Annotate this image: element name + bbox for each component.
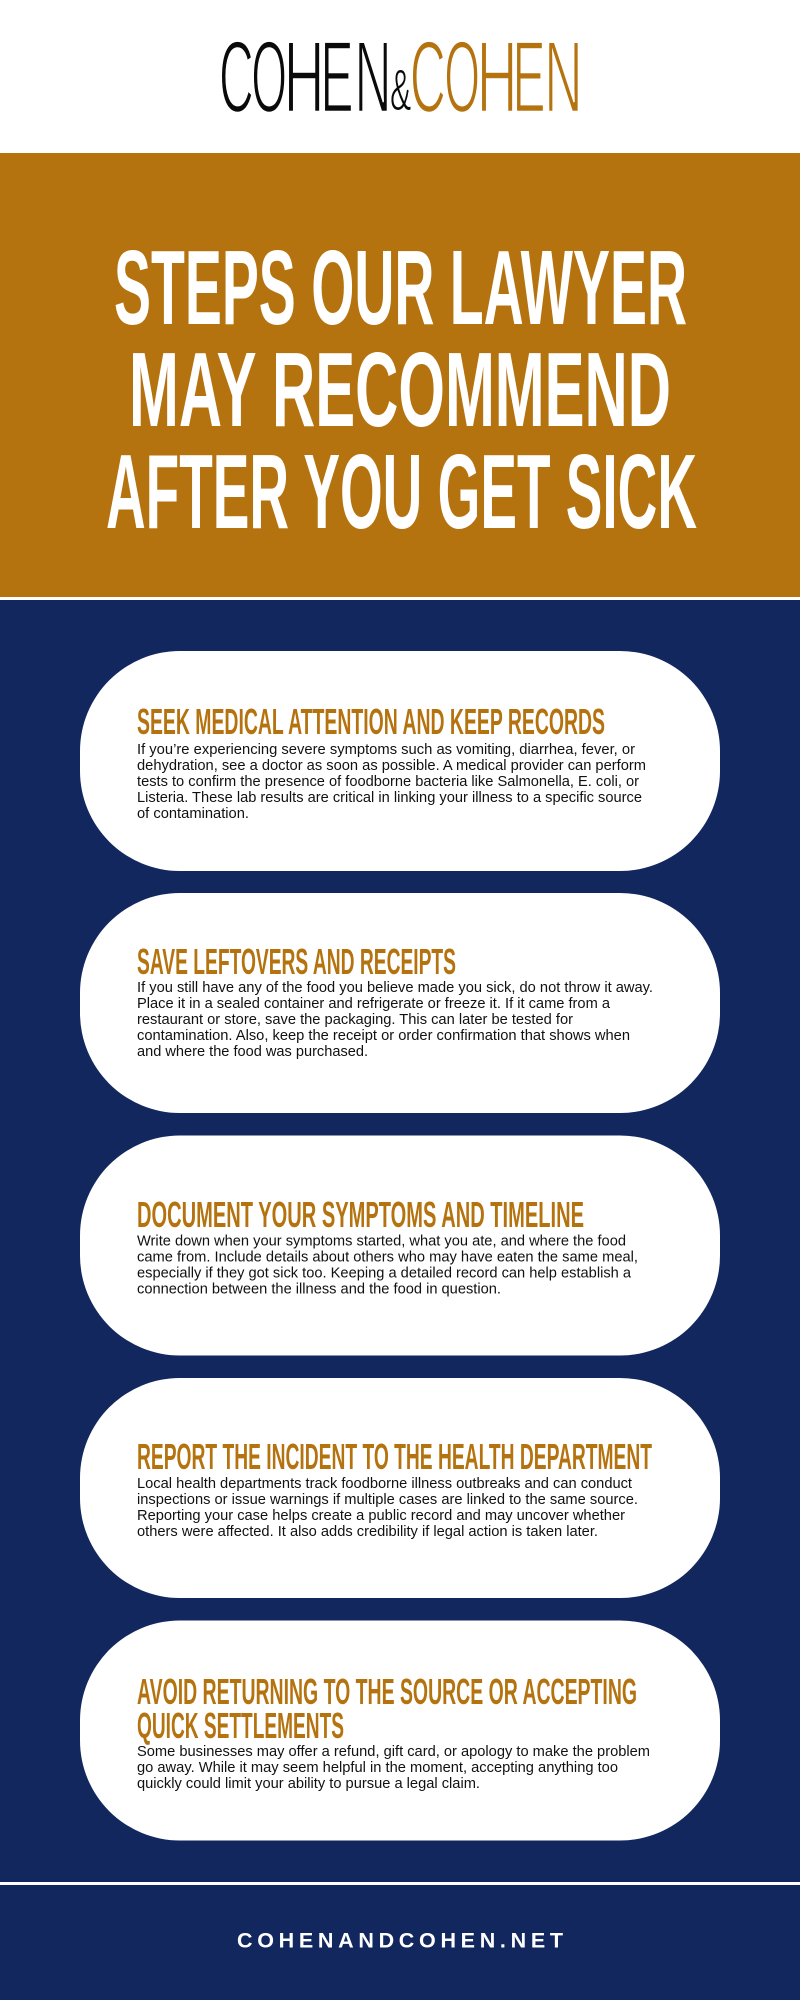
logo: Cohen & Cohen: C (410, 20, 446, 135)
text block: report the incident (137, 1475, 638, 1540)
text block: avoid returning (137, 1743, 650, 1792)
text block: document symptoms: Write down when your symptoms started, what you ate, and where the food (137, 1232, 626, 1250)
heading: avoid returning: QUICK SETTLEMENTS (137, 1705, 344, 1746)
text block: avoid returning: Some businesses may offer a refund, gift card, or apology to make the problem (137, 1743, 650, 1760)
text block: document symptoms (137, 1232, 638, 1298)
text block: seek medical attention: dehydration, see a doctor as soon as possible. A medical provider can perform (137, 757, 646, 774)
logo: Cohen & Cohen: N (544, 20, 583, 135)
logo: Cohen & Cohen: & (390, 58, 411, 122)
logo: Cohen & Cohen: O (444, 19, 480, 134)
heading: avoid returning (137, 1671, 637, 1746)
logo: Cohen & Cohen (219, 19, 583, 135)
panel: avoid returning (80, 1620, 720, 1840)
text block: save leftovers: Place it in a sealed container and refrigerate or freeze it. If it came from a (137, 995, 611, 1012)
text block: report the incident: inspections or issue warnings if multiple cases are linked to the same source. (137, 1491, 638, 1508)
text block: document symptoms: came from. Include details about others who may have eaten the same meal, (137, 1248, 638, 1266)
text block: save leftovers: and where the food was purchased. (137, 1043, 368, 1060)
text block: save leftovers: restaurant or store, save the packaging. This can later be tested for (137, 1011, 573, 1028)
logo: Cohen & Cohen: N (354, 21, 392, 135)
text block: save leftovers (137, 979, 653, 1060)
footer url: COHENANDCOHEN.NET (237, 1928, 563, 1952)
text block: seek medical attention (137, 741, 646, 822)
title banner (0, 153, 800, 597)
text block: report the incident: Local health departments track foodborne illness outbreaks and can conduct (137, 1475, 633, 1492)
header: logo band (0, 0, 800, 153)
logo: Cohen & Cohen: H (284, 20, 324, 134)
text block: seek medical attention: Listeria. These lab results are critical in linking your illness to a specific source (137, 789, 642, 806)
text block: avoid returning: go away. While it may seem helpful in the moment, accepting anything too (137, 1759, 618, 1776)
text block: document symptoms: connection between the illness and the food in question. (137, 1280, 501, 1298)
divider under banner (0, 597, 800, 600)
text block: save leftovers: If you still have any of the food you believe made you sick, do not throw it away. (137, 979, 653, 996)
text block: seek medical attention: If you’re experiencing severe symptoms such as vomiting, diarrhea, fever, or (137, 741, 635, 758)
text block: seek medical attention: of contamination. (137, 805, 249, 822)
logo: Cohen & Cohen: E (512, 20, 546, 135)
panel: report the incident (80, 1378, 720, 1598)
panel: save leftovers (80, 893, 720, 1113)
text block: save leftovers: contamination. Also, keep the receipt or order confirmation that shows when (137, 1027, 630, 1044)
text block: report the incident: others were affected. It also adds credibility if legal action is taken later. (137, 1523, 598, 1540)
text block: document symptoms: especially if they got sick too. Keeping a detailed record can help establish a (137, 1264, 632, 1282)
panel: seek medical attention (80, 651, 720, 871)
text block: report the incident: Reporting your case helps create a public record and may uncover whether (137, 1507, 625, 1524)
text block: avoid returning: quickly could limit your ability to pursue a legal claim. (137, 1775, 480, 1792)
title text (106, 229, 697, 551)
logo: Cohen & Cohen: E (320, 20, 354, 135)
text block: seek medical attention: tests to confirm the presence of foodborne bacteria like Salmonella, E. coli, or (137, 773, 639, 790)
logo: Cohen & Cohen: H (477, 20, 517, 134)
logo: Cohen & Cohen: O (251, 19, 287, 134)
divider above footer (0, 1882, 800, 1885)
heading: save leftovers: SAVE LEFTOVERS AND RECEIPTS (137, 941, 456, 982)
logo: Cohen & Cohen: C (219, 20, 254, 134)
panel: document symptoms (80, 1136, 720, 1356)
